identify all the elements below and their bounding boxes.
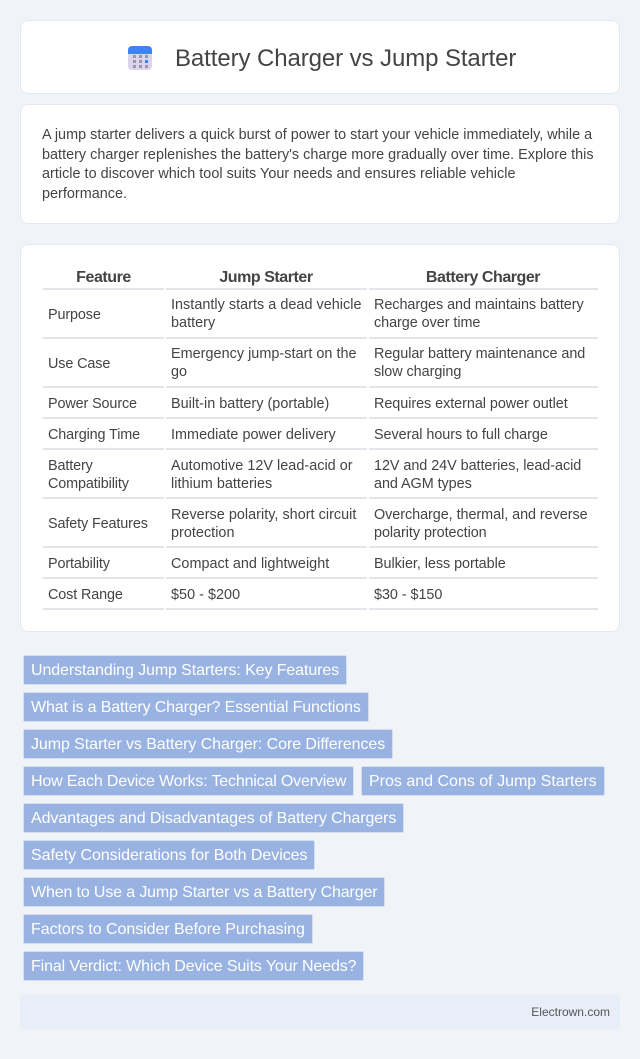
comparison table panel: Recharges and maintains battery xyxy=(374,297,584,313)
row: battery compatibility: Battery xyxy=(48,458,93,474)
comparison table panel: protection xyxy=(171,525,234,541)
comparison table panel: go xyxy=(171,364,187,380)
tag: Factors to Consider Before Purchasing xyxy=(31,921,305,938)
header panel xyxy=(20,20,620,94)
comparison table panel: Compact and lightweight xyxy=(171,556,329,572)
comparison table panel: $30 - $150 xyxy=(374,587,442,603)
comparison table panel: Instantly starts a dead vehicle xyxy=(171,297,362,313)
tag: Pros and Cons of Jump Starters xyxy=(369,773,597,790)
comparison table panel: charge over time xyxy=(374,315,480,331)
row: battery compatibility xyxy=(48,458,129,492)
tag: How Each Device Works: Technical Overview xyxy=(31,773,346,790)
table header: feature: Feature xyxy=(76,269,131,286)
comparison table panel: lithium batteries xyxy=(171,476,272,492)
tag xyxy=(23,914,313,944)
intro text: article to discover which tool suits Your needs and ensures reliable vehicle xyxy=(42,166,515,182)
tag: When to Use a Jump Starter vs a Battery Charger xyxy=(31,884,377,901)
tag: What is a Battery Charger? Essential Functions xyxy=(31,699,361,716)
comparison table panel: Regular battery maintenance and xyxy=(374,346,585,362)
row: power source: Power Source xyxy=(48,396,137,412)
topic tags xyxy=(23,655,605,981)
footer credit: Electrown.com xyxy=(531,1005,610,1019)
comparison table panel: battery xyxy=(171,315,215,331)
tag xyxy=(23,877,385,907)
row: safety features: Safety Features xyxy=(48,516,148,532)
table header: battery charger: Battery Charger xyxy=(426,269,540,286)
row: use case: Use Case xyxy=(48,356,110,372)
comparison table panel: Overcharge, thermal, and reverse xyxy=(374,507,588,523)
comparison table panel: Reverse polarity, short circuit xyxy=(171,507,356,523)
comparison table panel: Emergency jump-start on the xyxy=(171,346,357,362)
table header: jump starter: Jump Starter xyxy=(219,269,313,286)
title: Battery Charger vs Jump Starter xyxy=(175,45,516,72)
tag: Understanding Jump Starters: Key Features xyxy=(31,662,339,679)
comparison table panel xyxy=(20,244,620,632)
tag: Safety Considerations for Both Devices xyxy=(31,847,307,864)
tag xyxy=(23,951,364,981)
tag xyxy=(23,655,347,685)
comparison table panel: Several hours to full charge xyxy=(374,427,548,443)
comparison table panel: $50 - $200 xyxy=(171,587,240,603)
tag: Final Verdict: Which Device Suits Your Needs? xyxy=(31,958,356,975)
comparison table panel: Bulkier, less portable xyxy=(374,556,506,572)
tag xyxy=(23,692,369,722)
intro text: battery charger replenishes the battery's charge more gradually over time. Explore this xyxy=(42,146,594,162)
icon: calendar xyxy=(128,46,152,70)
intro text xyxy=(42,127,594,202)
tag xyxy=(23,766,354,796)
comparison table panel: Built-in battery (portable) xyxy=(171,396,329,412)
tag: Advantages and Disadvantages of Battery Chargers xyxy=(31,810,396,827)
footer xyxy=(20,995,620,1029)
comparison table panel: Automotive 12V lead-acid or xyxy=(171,458,353,474)
comparison table panel: slow charging xyxy=(374,364,461,380)
comparison table panel: polarity protection xyxy=(374,525,487,541)
row: cost range: Cost Range xyxy=(48,587,123,603)
tag: Jump Starter vs Battery Charger: Core Differences xyxy=(31,736,385,753)
intro text: A jump starter delivers a quick burst of power to start your vehicle immediately, while a xyxy=(42,127,592,143)
comparison table panel: Immediate power delivery xyxy=(171,427,336,443)
row: battery compatibility: Compatibility xyxy=(48,476,129,492)
comparison table panel: and AGM types xyxy=(374,476,472,492)
tag xyxy=(23,840,315,870)
comparison table panel: 12V and 24V batteries, lead-acid xyxy=(374,458,581,474)
row: portability: Portability xyxy=(48,556,110,572)
tag xyxy=(23,729,393,759)
comparison table panel: Requires external power outlet xyxy=(374,396,568,412)
tag xyxy=(361,766,605,796)
intro panel xyxy=(20,104,620,224)
row: purpose: Purpose xyxy=(48,307,101,323)
intro text: performance. xyxy=(42,186,127,202)
row: charging time: Charging Time xyxy=(48,427,140,443)
tag xyxy=(23,803,404,833)
